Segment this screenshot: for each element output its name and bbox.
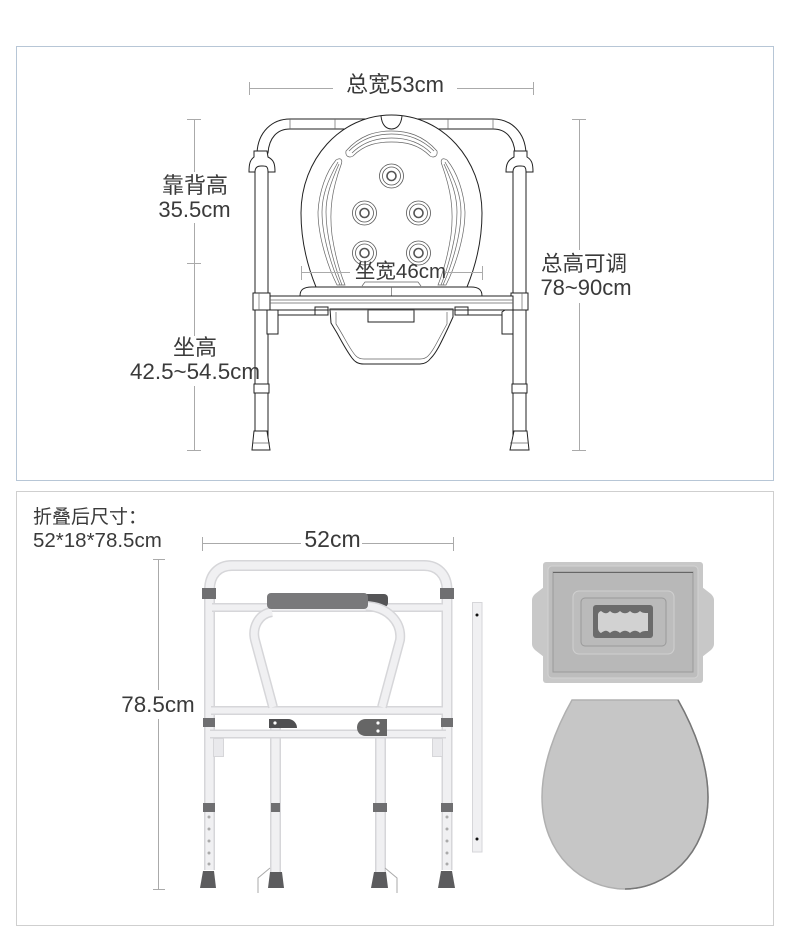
- tray handle: [598, 611, 648, 633]
- dimension: seat height: 42.5~54.5cm: [130, 359, 260, 384]
- dimension: folded width: [202, 526, 454, 552]
- collars: [202, 588, 454, 812]
- folded size caption: [33, 506, 162, 552]
- dimension: backrest height: 靠背高: [162, 173, 228, 198]
- dimension: folded width: 52cm: [304, 526, 361, 552]
- dimension: total height adjustable: 78~90cm: [540, 275, 632, 300]
- outer frame tube: [210, 566, 447, 870]
- backrest tube and pad: [254, 593, 400, 707]
- dimension: backrest height: [158, 120, 231, 264]
- dimension: folded height: [121, 560, 195, 890]
- cross bars: [210, 608, 446, 756]
- line drawing: commode chair front view: [249, 115, 533, 450]
- seat lid top view: [542, 700, 708, 889]
- backrest: five massage studs: [352, 164, 430, 265]
- folded size caption: 折叠后尺寸：: [33, 506, 147, 528]
- loose support rod: [472, 602, 482, 852]
- dimension: total height adjustable: 总高可调: [541, 252, 627, 276]
- dimension: folded height: 78.5cm: [121, 692, 195, 717]
- folded frame: [200, 566, 455, 893]
- dimension: total width: [250, 72, 534, 97]
- dimension: backrest height: 35.5cm: [158, 197, 231, 222]
- dimension: seat width: [302, 260, 482, 283]
- panel: overall dimensions: [16, 46, 774, 480]
- frame: left leg: [249, 151, 275, 450]
- dimension: seat height: [130, 264, 260, 450]
- inner legs: [258, 722, 397, 893]
- frame: top rail: [257, 119, 526, 153]
- folded size caption: 52*18*78.5cm: [33, 529, 162, 552]
- bucket tray top view: [532, 562, 714, 683]
- seat and cross bar: [267, 282, 513, 334]
- backrest: [301, 115, 482, 287]
- dimension: total height adjustable: [540, 120, 632, 450]
- dimension: seat width: 坐宽46cm: [355, 260, 446, 283]
- commode bucket: [315, 307, 468, 364]
- dimension: seat height: 坐高: [173, 335, 217, 360]
- hinge brackets: [269, 719, 387, 736]
- panel: folded dimensions: [16, 492, 774, 926]
- adjustment holes: [208, 816, 448, 866]
- dimension: total width: 总宽53cm: [346, 72, 444, 97]
- frame: right leg: [506, 151, 533, 450]
- rubber feet: [200, 871, 455, 888]
